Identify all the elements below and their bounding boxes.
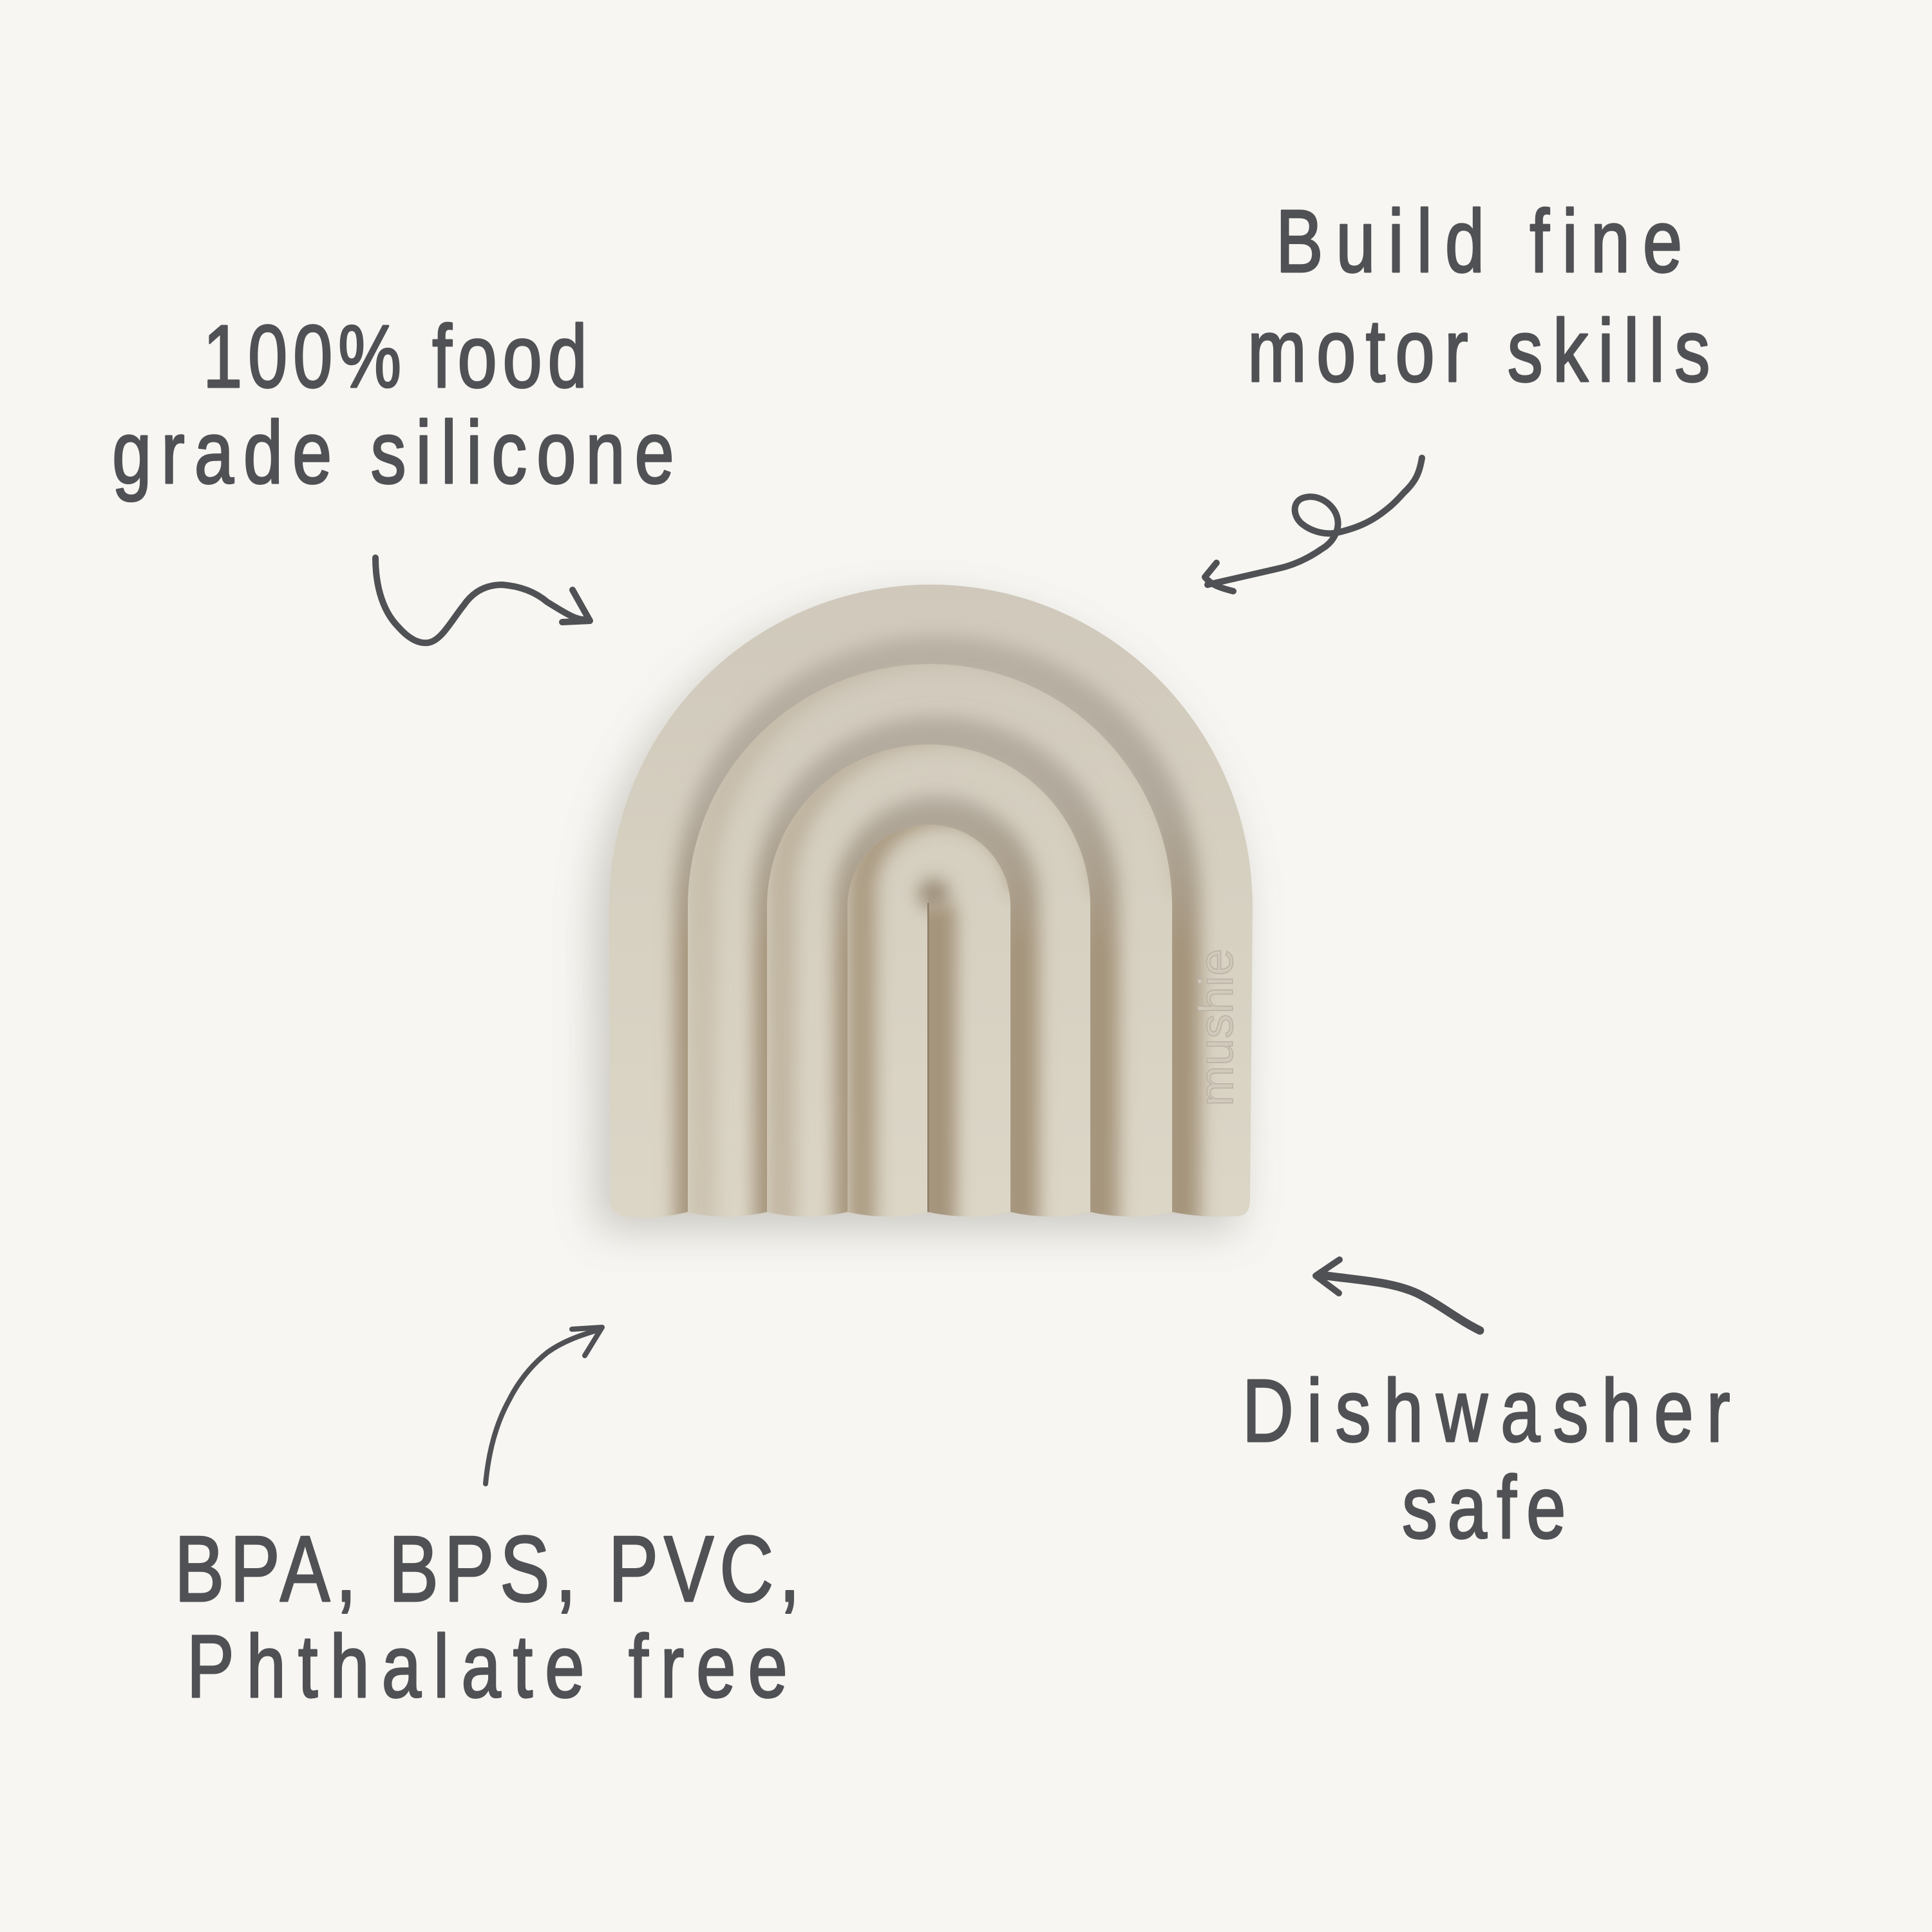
product drop shadow [596,603,1240,1229]
label: 100% food grade silicone: 100% food [203,307,587,406]
arch tubes [609,585,1253,1230]
centre slit shadow [915,905,956,1230]
outer tube [609,585,1253,1230]
centre groove glow [918,878,949,909]
arrow: top right, looping [1205,458,1422,591]
label: dishwasher safe [1242,1361,1730,1557]
label: BPA, BPS, PVC, Phthalate free: BPA, BPS, PVC, [175,1517,800,1621]
inner tube [848,824,1010,1216]
label: build fine motor skills [1247,192,1710,401]
label: build fine motor skills: Build fine [1276,192,1682,291]
arrow: bottom right [1316,1260,1480,1331]
label: dishwasher safe: safe [1402,1458,1566,1557]
label: dishwasher safe: Dishwasher [1242,1361,1730,1461]
arrow: bottom left [486,1327,602,1484]
label: build fine motor skills: motor skills [1247,301,1710,401]
label: BPA, BPS, PVC, Phthalate free [175,1517,800,1716]
product: rainbow arch teether [596,585,1253,1230]
third tube [767,730,1104,1230]
second tube [688,650,1186,1230]
embossed brand text: mushie [1189,949,1243,1106]
label: 100% food grade silicone [112,307,674,502]
arrow: top left, wavy [375,558,590,643]
label: BPA, BPS, PVC, Phthalate free: Phthalate free [187,1617,788,1716]
label: 100% food grade silicone: grade silicone [112,403,674,502]
